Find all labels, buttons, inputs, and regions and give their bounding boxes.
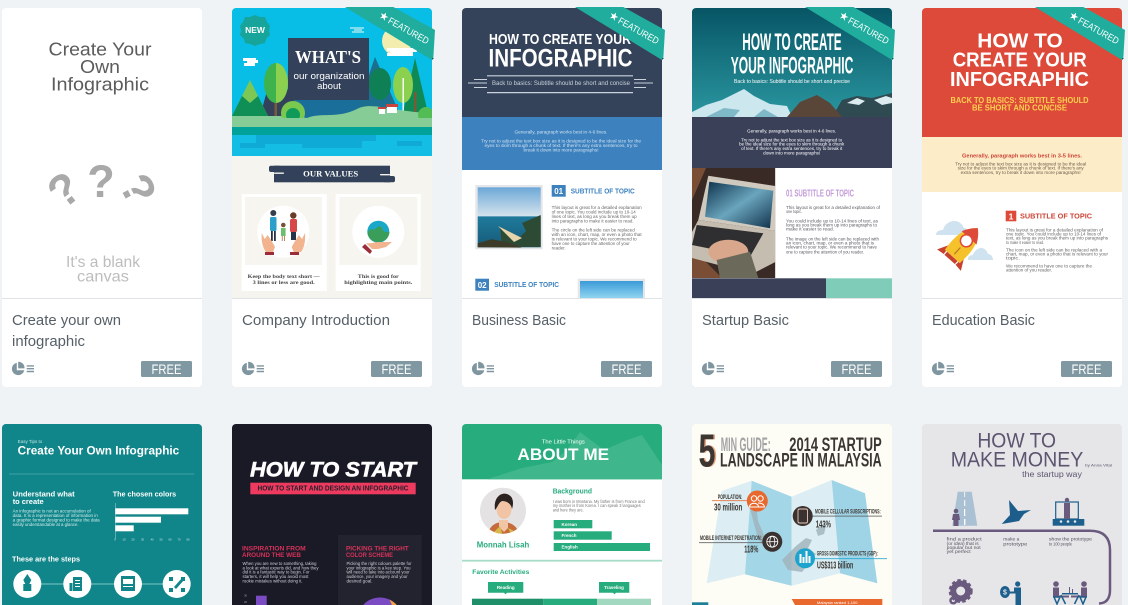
dark sign board: our organization (294, 71, 364, 82)
intro paragraph: of text. If there's any extra sentences, try to break it (741, 146, 843, 151)
heading (951, 429, 1112, 479)
intro paragraph: Try not to adjust the text box size as it is designed to be the ideal size for the (481, 138, 642, 143)
topic 01 body: The circle on the left side can be replaced (552, 228, 635, 233)
featured ribbon: ★ (1067, 9, 1081, 25)
dark sign board: about (317, 81, 341, 92)
topic 01 body: lines of text, as long as you break them up (552, 214, 637, 219)
topic 01 body: of one topic. You could include up to 10-14 (552, 209, 636, 214)
featured ribbon (575, 7, 665, 60)
thumbnail (922, 8, 1122, 273)
template title: Education Basic (932, 312, 1035, 329)
panel: 2014 startup landscape (692, 424, 892, 605)
topic 01 body: make it easier to read. (786, 226, 834, 232)
step: origami bird (1002, 500, 1031, 524)
section: understand what to create: to create (13, 497, 44, 506)
header mountains (487, 432, 662, 479)
topic 01: 01 SUBTITLE OF TOPIC (786, 189, 854, 200)
section: background: Background (553, 488, 592, 495)
topic 1: 1 (1009, 212, 1014, 222)
activity tags (488, 582, 629, 594)
bar chart stub: 20 (244, 600, 248, 604)
heading: Create Your Own Infographic (18, 446, 180, 458)
price badge: FREE (612, 361, 642, 377)
bar chart stub (244, 594, 267, 605)
topic 1 body: topic. (1006, 256, 1020, 261)
featured ribbon: FEATURED (386, 16, 431, 47)
bar chart: the chosen colors: 50 (159, 538, 163, 542)
heading (18, 439, 180, 458)
heading: INFOGRAPHIC (950, 69, 1089, 91)
heading (731, 29, 853, 85)
topic 1 body (1006, 228, 1109, 273)
topic 01 body: an icon, chart, map, or even a photo that is (786, 240, 874, 245)
panel: company introduction (232, 7, 435, 387)
topic 01 body: one to capture the attention of you reader. (786, 249, 864, 254)
value card: family: 3 lines or less are good. (253, 280, 316, 286)
template title: Startup Basic (702, 312, 789, 329)
section: background: I was born in Montana. My father is from France and (553, 499, 645, 504)
stat: gdp: GROSS DOMESTIC PRODUCTS (GDP): (817, 552, 878, 558)
bar chart: the chosen colors: 70 (177, 538, 181, 542)
section: inspiration: starters, it will help you avoid most (242, 574, 309, 579)
section: background: and here they are. (553, 507, 584, 512)
value card: globe in hand: highlighting main points. (344, 280, 413, 286)
heading: MIN GUIDE: (721, 435, 771, 456)
heading: INFOGRAPHIC (488, 45, 632, 73)
intro paragraph: Try not to adjust the text box size as it is designed to (741, 137, 843, 142)
stat: mobile subscriptions: 143% (816, 519, 831, 530)
intro paragraph (481, 130, 642, 152)
topic 1 body: to make it easier to read. (1006, 240, 1044, 245)
subtitle with rules: Back to basics: Subtitle should be short and concise (492, 80, 630, 87)
icon: question marks: ? (109, 165, 167, 213)
section: colour scheme: desired goal. (346, 578, 372, 583)
topic 1 body: attention of you reader. (1006, 268, 1052, 273)
section: inspiration: rookie mistakes without doing it. (242, 578, 302, 583)
featured ribbon: ★ (837, 9, 851, 25)
template title: Company Introduction (242, 312, 390, 329)
icon: chart type (472, 362, 494, 375)
topic 1 body: This layout is great for a detailed explanation of (1006, 228, 1104, 233)
topic 01 body: long as you break them up into paragraphs to (786, 222, 878, 227)
mountains (692, 89, 892, 117)
icon: money bag person (1000, 581, 1021, 605)
section: background: my mother is from Korea. I can speak 3 languages (553, 503, 641, 508)
badge: new: NEW (245, 25, 266, 35)
stat: mobile internet: MOBILE INTERNET PENETRATION: (700, 536, 762, 542)
stat: population: POPULATION: (718, 495, 742, 501)
heading: CREATE YOUR (953, 50, 1087, 72)
intro paragraph: size for the eyes to skim through a chunk of text. If there's any (958, 166, 1085, 171)
intro paragraph: be the ideal size for the eyes to skim through a chunk (739, 142, 845, 147)
featured ribbon: FEATURED (1076, 16, 1121, 47)
bar chart stub: 30 (244, 594, 248, 598)
topic 01 body (786, 205, 881, 254)
price badge: FREE (382, 361, 412, 377)
section heading: activities: Favorite Activities (472, 569, 530, 576)
heading: YOUR INFOGRAPHIC (731, 53, 853, 80)
panel: create your own infographic (2, 8, 202, 387)
big five: 5 (700, 425, 717, 477)
folded map (707, 480, 877, 586)
section: inspiration: a look at what experts did, and how they (242, 565, 319, 570)
panel: startup basic (692, 7, 895, 387)
topic 01: SUBTITLE OF TOPIC (571, 186, 635, 195)
stat: gdp (795, 548, 887, 571)
icon: question marks: ? (38, 161, 91, 218)
bar chart: the chosen colors: 20 (131, 538, 135, 542)
stat: mobile internet (699, 532, 782, 556)
intro paragraph: eyes to skim through a chunk of text. If there's any extra sentences, try to (484, 143, 638, 148)
bar chart: the chosen colors: 10 (122, 538, 126, 542)
featured ribbon: ★ (607, 9, 621, 25)
topic 01 body (552, 205, 643, 250)
big five: 5 (698, 425, 716, 477)
heading: Back to basics: Subtitle should be short and precise (734, 79, 850, 85)
section: understand what to create: easily understandable at a glance. (13, 522, 79, 527)
intro paragraph (955, 154, 1086, 175)
section: colour scheme (346, 545, 412, 583)
price badge: FREE (842, 361, 872, 377)
stat: population: 30 million (714, 503, 742, 514)
intro paragraph: Generally, paragraph works best in 3-5 lines. (962, 154, 1082, 160)
language bars (554, 520, 650, 551)
footer strip (692, 599, 882, 605)
timeline arrow (933, 531, 1110, 604)
featured ribbon (1035, 7, 1125, 60)
step: road (952, 492, 977, 526)
steps timeline (13, 570, 191, 598)
intro paragraph: Generally, paragraph works best in 4-6 lines. (747, 128, 836, 134)
heading: the startup way (1022, 469, 1083, 479)
section: inspiration (242, 545, 319, 583)
blank canvas caption: It's a blank (66, 254, 141, 271)
topic 01 (552, 185, 635, 197)
section: colour scheme: your infographic is a key step. You (346, 565, 411, 570)
thumbnail (232, 8, 434, 298)
language bars: Korean (562, 522, 577, 527)
section: inspiration: did it is a fantastic way to begin. For (242, 570, 310, 575)
section: colour scheme: PICKING THE RIGHT (346, 545, 409, 552)
heading: The Little Things (542, 440, 585, 446)
step: presentation (1053, 498, 1084, 526)
step text: prototype (1003, 536, 1028, 546)
heading (720, 435, 882, 472)
step text: show prototype (1049, 536, 1092, 546)
section: understand what to create: data. It is a representation of information in (13, 513, 98, 518)
blank canvas heading: Own (80, 56, 120, 77)
heading: MAKE MONEY (951, 449, 1083, 472)
step text: find a product: find a product (947, 536, 983, 542)
topic 01 body: relevant to your topic. We recommend to have (786, 245, 878, 250)
template title: Business Basic (472, 312, 566, 329)
value card: globe in hand: This is good for (358, 274, 400, 280)
activity tags: Reading (497, 585, 515, 590)
featured ribbon (345, 7, 435, 60)
dark sign board (288, 38, 369, 100)
template title: infographic (12, 333, 85, 350)
section: inspiration: INSPIRATION FROM (242, 545, 306, 552)
featured ribbon: FEATURED (846, 16, 891, 47)
icon: chart type (242, 362, 264, 375)
dark sign board: WHAT'S (295, 47, 361, 67)
bar chart: the chosen colors: 30 (141, 538, 144, 542)
panel: about me (462, 424, 662, 605)
intro paragraph: down into more paragraphs! (763, 150, 820, 155)
step text: find a product (947, 536, 983, 554)
section: understand what to create (13, 490, 100, 527)
topic 01 body: You could include up to 10-14 lines of text, as (786, 218, 878, 223)
panel: business basic (462, 7, 665, 387)
section: understand what to create: a graphic format designed to make the data (13, 518, 100, 522)
bar chart: the chosen colors (113, 490, 190, 542)
icon: gears (950, 580, 972, 603)
section: colour scheme: audience, your imagery and your (346, 574, 408, 579)
section: inspiration: AROUND THE WEB (242, 552, 301, 559)
section: colour scheme: Picking the right colours palette for (346, 561, 412, 566)
topic 01 body: The image on the left side can be replaced with (786, 236, 880, 241)
step text: show prototype: show the prototype (1049, 536, 1092, 542)
heading: LANDSCAPE IN MALAYSIA (720, 451, 882, 472)
topic 1: SUBTITLE OF TOPIC (1020, 212, 1093, 221)
section: colour scheme: will need to take into account your (346, 570, 410, 575)
bar chart: the chosen colors: The chosen colors (113, 490, 176, 499)
topic 01 body: reader. (552, 245, 566, 250)
section: understand what to create: An infographic is not an accumulation of (13, 508, 92, 513)
topic 1 body: We recommend to have one to capture the (1006, 264, 1093, 269)
heading: HOW TO START (250, 458, 418, 482)
value card: globe in hand (336, 194, 421, 291)
stat: mobile internet: 118% (744, 545, 758, 556)
step text: find a product: yet perfect (947, 549, 972, 554)
topic 1 body: The icon on the left side can be replaced with a (1006, 248, 1103, 253)
heading (951, 34, 1088, 86)
badge: new (240, 15, 270, 46)
featured ribbon (805, 7, 895, 60)
topic 01 body: have one to capture the attention of your (552, 241, 630, 246)
heading: HOW TO CREATE YOUR (489, 32, 631, 48)
topic 1 body: one topic. You could include up to 10-14 lines of (1006, 232, 1102, 236)
photo: portrait (480, 488, 526, 540)
heading: HOW TO CREATE (742, 29, 842, 56)
topic 01 body: This layout is great for a detailed explanation (552, 205, 642, 210)
template title: Create your own (12, 312, 121, 329)
subtitle: BE SHORT AND CONCISE (972, 104, 1067, 113)
bar chart: the chosen colors: 0 (114, 538, 116, 542)
bar chart: the chosen colors: 80 (186, 538, 190, 542)
thumbnail (692, 8, 892, 298)
section heading: steps: These are the steps (12, 555, 80, 564)
panel: how to make money (922, 424, 1122, 605)
heading: HOW TO (977, 31, 1063, 53)
activity tags: Traveling (604, 585, 624, 590)
heading (490, 34, 632, 66)
blank canvas caption: canvas (77, 268, 129, 286)
blank canvas heading (48, 38, 152, 94)
topic 01 body: one topic. (786, 209, 802, 214)
topic 01 body: is relevant to your topic. We recommend to (552, 236, 637, 242)
step text: prototype: make a (1003, 536, 1020, 542)
icon: question marks (38, 156, 167, 218)
price badge: FREE (1072, 361, 1102, 377)
panel: how to start (232, 424, 432, 605)
section: background (553, 488, 645, 512)
template title (12, 312, 121, 350)
stat: gdp: US$313 billion (817, 560, 853, 571)
section: inspiration: When you are new to something, taking (242, 561, 317, 566)
icon: meeting (1053, 581, 1087, 604)
subtitle: BACK TO BASICS: SUBTITLE SHOULD (950, 96, 1089, 105)
thumbnail (462, 8, 662, 298)
photo: laptop (692, 168, 775, 278)
step text: prototype: prototype (1003, 542, 1028, 546)
value card: family: Keep the body text short — (248, 274, 321, 280)
icon: question marks: ? (87, 156, 115, 207)
stat: mobile subscriptions (793, 506, 882, 530)
topic 1 body: text, as long as you break them up into paragraphs (1006, 236, 1108, 240)
icon: chart type (932, 362, 954, 375)
intro paragraph: Generally, paragraph works best in 4-6 lines. (514, 130, 608, 134)
icon: chart type (12, 362, 34, 375)
language bars: English (562, 545, 578, 550)
topic 01 body: This layout is great for a detailed explanation of (786, 205, 881, 210)
subtitle (951, 97, 1088, 110)
name: Monnah Lisah (477, 541, 529, 550)
topic 1 body: chart, map, or even a photo that is relevant to your (1006, 252, 1109, 256)
step text: show prototype: to 100 people (1049, 542, 1072, 546)
intro paragraph: Try not to adjust the text box size as it is designed to be the ideal (955, 162, 1086, 166)
icon: rocket (936, 217, 993, 271)
heading: Easy Tips to (18, 439, 43, 444)
step text: find a product: (or idea) that is (947, 541, 979, 546)
blank canvas caption (66, 254, 141, 286)
topic 02: SUBTITLE OF TOPIC (494, 280, 560, 289)
value card: family (242, 194, 327, 291)
heading: ABOUT ME (517, 446, 609, 464)
bar chart: the chosen colors: 40 (150, 538, 154, 542)
photo: coast (475, 185, 543, 249)
subtitle with rules (468, 75, 653, 93)
intro paragraph: break it down into more paragraphs! (524, 148, 598, 152)
topic 02 (475, 279, 645, 298)
section: colour scheme: COLOR SCHEME (346, 552, 393, 559)
stacked bar (472, 599, 651, 605)
topic 01: 01 (554, 187, 564, 196)
price badge: FREE (152, 361, 182, 377)
pie chart stub (363, 597, 397, 605)
banner: our values (269, 166, 395, 182)
footer strip: Malaysia ranked 1-100 (817, 600, 858, 605)
bar chart: the chosen colors: 60 (168, 538, 172, 542)
icon: chart type (702, 362, 724, 375)
heading: HOW TO (977, 429, 1056, 452)
heading: 2014 STARTUP (789, 435, 882, 456)
intro paragraph (739, 128, 845, 155)
icon: money bag person: $ (1003, 590, 1007, 596)
topic 02: 02 (478, 281, 487, 290)
intro paragraph: extra sentences, try to break it down into more paragraphs! (961, 170, 1081, 175)
panel: create your own infographic (teal) (2, 424, 202, 605)
language bars: French (562, 533, 577, 538)
featured ribbon: FEATURED (616, 16, 661, 47)
stat: mobile subscriptions: MOBILE CELLULAR SUBSCRIPTIONS: (815, 509, 881, 515)
topic 1 (1006, 211, 1093, 222)
subtitle bar: HOW TO START AND DESIGN AN INFOGRAPHIC (258, 486, 408, 493)
featured ribbon: ★ (377, 9, 391, 25)
subtitle bar (250, 483, 416, 494)
heading: by Anna Vital (1085, 464, 1112, 468)
blank canvas heading: Infographic (51, 74, 149, 94)
stat: population (712, 490, 768, 514)
banner: our values: OUR VALUES (303, 168, 358, 178)
blank canvas heading: Create Your (48, 38, 152, 60)
step text: find a product: popular but not (947, 545, 981, 550)
topic 01 body: into paragraphs to make it easier to read. (552, 218, 634, 223)
panel: education basic (922, 7, 1125, 387)
footer colour bar (692, 278, 892, 298)
section: understand what to create: Understand what (13, 490, 75, 499)
topic 01 body: with an icon, chart, map, or even a photo that (552, 232, 643, 237)
